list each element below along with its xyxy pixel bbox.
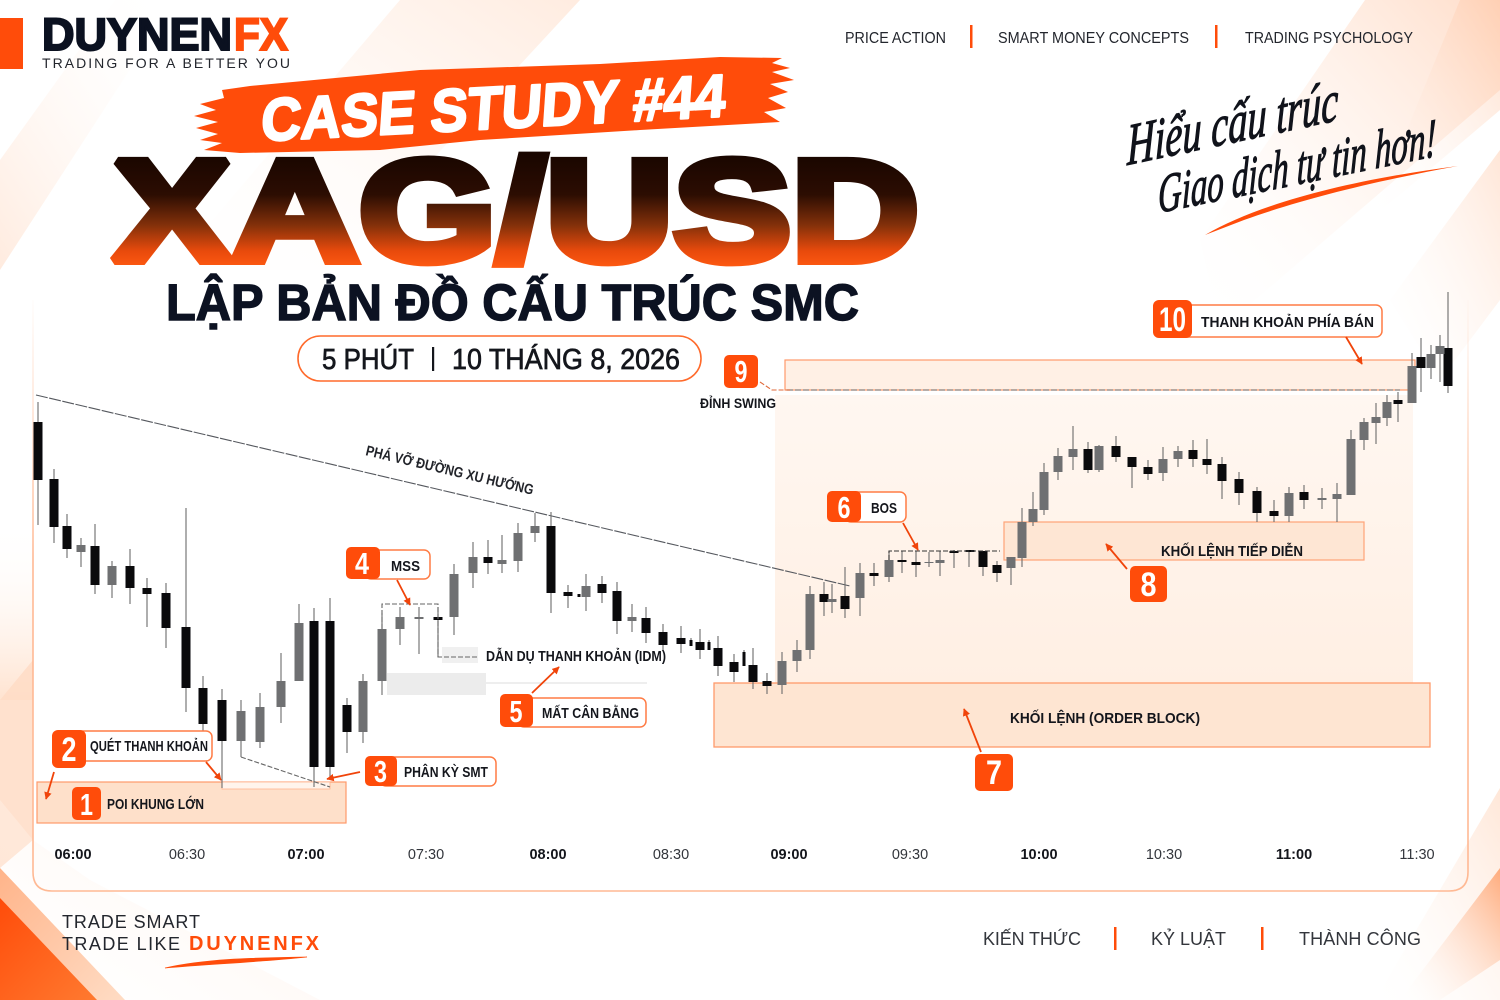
callout 3: 3 xyxy=(374,754,387,789)
callout 1 xyxy=(46,772,204,822)
top navigation xyxy=(845,25,1413,48)
logo xyxy=(0,9,290,71)
callout 9: 9 xyxy=(734,354,748,389)
label: swing high text: ĐỈNH SWING xyxy=(700,396,776,411)
callout 8 xyxy=(1106,544,1167,604)
callout 2: QUÉT THANH KHOẢN xyxy=(90,738,208,755)
callout 3 xyxy=(327,754,496,789)
pill: duration and date xyxy=(298,336,701,381)
time axis: 11:30 xyxy=(1399,847,1435,863)
callout 2 xyxy=(52,730,221,780)
pill: duration and date: 5 PHÚT xyxy=(322,343,414,376)
callout 6 xyxy=(827,490,918,550)
callout 7: 7 xyxy=(986,754,1002,792)
top navigation: TRADING PSYCHOLOGY xyxy=(1245,30,1413,47)
callout 8: 8 xyxy=(1140,566,1156,604)
trend line xyxy=(36,395,850,586)
zone: premium area xyxy=(775,395,1413,683)
callout 10: 10 xyxy=(1159,301,1186,339)
time axis: 07:30 xyxy=(408,847,444,863)
label: trendline break: PHÁ VỠ ĐƯỜNG XU HƯỚNG xyxy=(364,441,536,499)
time axis: 10:30 xyxy=(1146,847,1182,863)
zone: sell-side liquidity band xyxy=(785,360,1415,390)
time axis xyxy=(54,847,1435,863)
time axis: 06:30 xyxy=(169,847,205,863)
logo: FX xyxy=(234,9,288,60)
callout 10: THANH KHOẢN PHÍA BÁN xyxy=(1201,314,1374,331)
zone: continuation order block xyxy=(1004,522,1364,560)
callout 9 xyxy=(724,354,758,389)
callout 5: 5 xyxy=(510,694,522,729)
footer values: KỶ LUẬT xyxy=(1151,928,1226,949)
callout 4 xyxy=(346,546,430,605)
slogan handwriting: Hiểu cấu trúc xyxy=(1126,68,1338,178)
zone: order block: KHỐI LỆNH (ORDER BLOCK) xyxy=(1010,709,1200,727)
imbalance zones xyxy=(387,647,647,695)
label: inducement: DẪN DỤ THANH KHOẢN (IDM) xyxy=(486,648,666,665)
logo: TRADING FOR A BETTER YOU xyxy=(42,55,290,71)
callout 1: 1 xyxy=(80,787,93,822)
title: XAG/USD: XAG/USD xyxy=(113,130,919,292)
callout 10 xyxy=(1153,300,1382,364)
footer slogan: DUYNENFX xyxy=(189,933,320,955)
time axis: 08:30 xyxy=(653,847,689,863)
top navigation: SMART MONEY CONCEPTS xyxy=(998,30,1189,47)
callout 6: BOS xyxy=(871,500,897,517)
zone: order block xyxy=(714,683,1430,747)
banner: case study brush: CASE STUDY #44 xyxy=(259,61,729,154)
callout 4: MSS xyxy=(391,558,420,575)
footer values: KIẾN THỨC xyxy=(983,928,1081,949)
callout 6: 6 xyxy=(838,490,850,525)
zone: POI higher timeframe xyxy=(37,782,346,823)
time axis: 09:30 xyxy=(892,847,928,863)
callout 5: MẤT CÂN BẰNG xyxy=(542,704,639,722)
pill: duration and date: 10 THÁNG 8, 2026 xyxy=(452,343,680,376)
candlestick series xyxy=(38,292,1448,788)
callout 3: PHÂN KỲ SMT xyxy=(404,763,488,781)
time axis: 11:00 xyxy=(1276,847,1312,863)
logo: DUYNEN xyxy=(42,9,232,60)
callout 7 xyxy=(964,709,1013,792)
footer values: THÀNH CÔNG xyxy=(1299,928,1421,949)
footer slogan: TRADE SMART xyxy=(62,912,200,932)
subtitle: LẬP BẢN ĐỒ CẤU TRÚC SMC xyxy=(166,273,859,331)
callout 4: 4 xyxy=(355,546,370,581)
footer values xyxy=(983,927,1421,950)
callout 5 xyxy=(500,667,646,729)
time axis: 09:00 xyxy=(770,847,808,863)
callout 2: 2 xyxy=(62,731,76,769)
callout 1: POI KHUNG LỚN xyxy=(107,795,204,813)
panel: chart frame xyxy=(33,300,1468,891)
slogan underline swoosh xyxy=(1205,166,1458,235)
time axis: 06:00 xyxy=(54,847,92,863)
footer slogan xyxy=(62,912,320,968)
time axis: 08:00 xyxy=(529,847,567,863)
time axis: 10:00 xyxy=(1020,847,1058,863)
time axis: 07:00 xyxy=(287,847,325,863)
footer slogan: TRADE LIKE xyxy=(62,934,180,954)
structure dashed lines xyxy=(241,382,1000,787)
zone: continuation order block: KHỐI LỆNH TIẾP DIỄN xyxy=(1161,542,1303,560)
top navigation: PRICE ACTION xyxy=(845,30,946,47)
